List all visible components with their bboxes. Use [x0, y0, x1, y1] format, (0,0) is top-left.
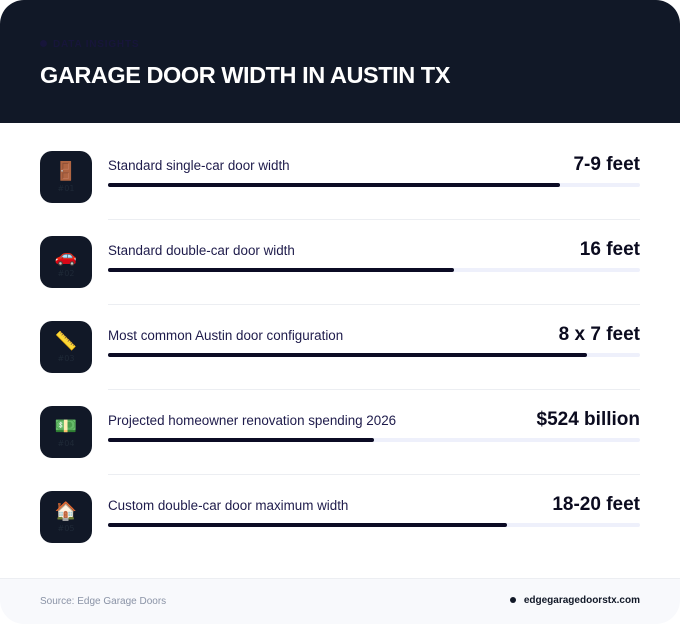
value: 16 feet	[580, 239, 640, 260]
icon: ruler: #03	[58, 354, 74, 363]
icon: door: 🚪	[55, 161, 77, 182]
value: 7-9 feet	[573, 154, 640, 175]
label: Most common Austin door configuration	[108, 328, 343, 343]
icon: ruler: 📏	[55, 331, 77, 352]
bar	[108, 268, 640, 272]
value: 18-20 feet	[552, 494, 640, 515]
icon: ruler	[40, 321, 92, 373]
icon: house	[40, 491, 92, 543]
icon: car	[40, 236, 92, 288]
title: GARAGE DOOR WIDTH IN AUSTIN TX	[40, 62, 450, 88]
row 5	[40, 491, 640, 543]
row 4	[40, 406, 640, 458]
icon: door: #01	[58, 184, 74, 193]
icon: car: #02	[58, 269, 74, 278]
value: $524 billion	[537, 409, 640, 430]
footer	[0, 578, 680, 624]
header	[0, 0, 680, 123]
icon: house: 🏠	[55, 501, 77, 522]
bar	[108, 438, 640, 442]
label: Custom double-car door maximum width	[108, 498, 348, 513]
row 1	[40, 151, 640, 203]
label: Projected homeowner renovation spending 2026	[108, 413, 396, 428]
website: edgegaragedoorstx.com	[524, 595, 640, 606]
bar	[108, 183, 640, 187]
icon: car: 🚗	[55, 246, 77, 267]
value: 8 x 7 feet	[559, 324, 640, 345]
icon: door	[40, 151, 92, 203]
bar	[108, 523, 640, 527]
icon: money: #04	[58, 439, 74, 448]
label: Standard single-car door width	[108, 158, 290, 173]
icon: money: 💵	[55, 416, 77, 437]
row 2	[40, 236, 640, 288]
source: Source: Edge Garage Doors	[40, 596, 166, 607]
icon: money	[40, 406, 92, 458]
bar	[108, 353, 640, 357]
icon: house: #05	[58, 524, 74, 533]
tag: data insights: DATA INSIGHTS	[53, 39, 139, 50]
row 3	[40, 321, 640, 373]
label: Standard double-car door width	[108, 243, 295, 258]
